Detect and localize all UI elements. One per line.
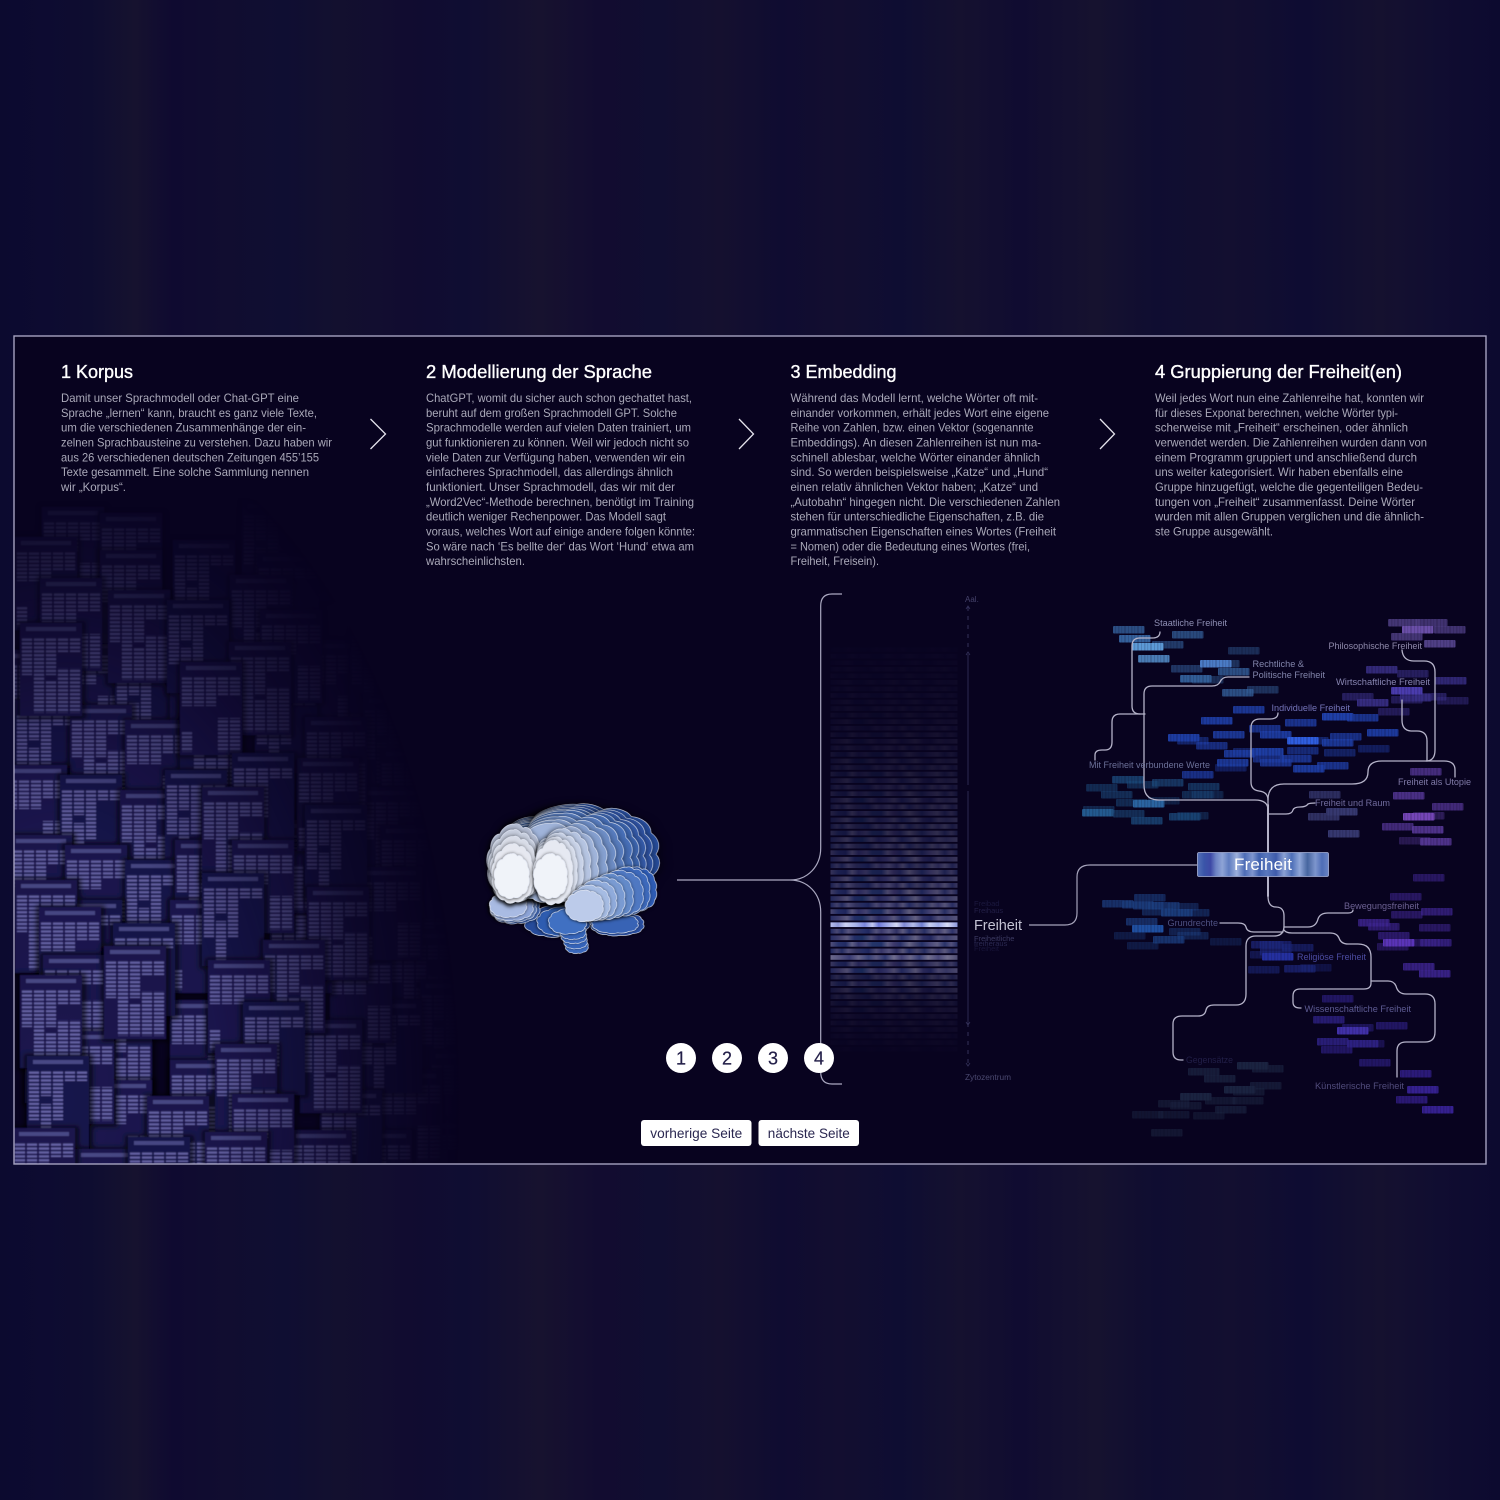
cluster bars: Religiöse Freiheit <box>1248 941 1332 974</box>
text block 4: Gruppe hinzugefügt, welche die gegenteiligen Bedeu- <box>1155 480 1423 494</box>
word list around Freiheit: Freiheitliche <box>974 934 1014 943</box>
button: nächste Seite: nächste Seite <box>768 1125 850 1141</box>
cluster bars: Freiheit als Utopie <box>1382 768 1464 846</box>
arrow 2 <box>739 419 754 449</box>
central Freiheit box <box>1198 852 1328 876</box>
button: nächste Seite <box>758 1120 859 1146</box>
brace connecting brain to embedding chart <box>677 594 842 1084</box>
text block 3: grammatischen Eigenschaften eines Wortes (Freiheit <box>790 524 1057 538</box>
text block 1: aus 26 verschiedenen deutschen Zeitungen 455’155 <box>61 450 319 464</box>
text block 4: ste Gruppe ausgewählt. <box>1155 524 1273 538</box>
cluster bars: Wissenschaftliche Freiheit <box>1313 995 1408 1066</box>
panel border <box>14 336 1486 1164</box>
section 4: Gruppierung der Freiheit(en) <box>1154 362 1427 538</box>
label: Philosophische Freiheit: Philosophische Freiheit <box>1328 641 1422 652</box>
label: Freiheit als Utopie: Freiheit als Utopie <box>1398 777 1471 788</box>
vocabulary axis from Aal to Zytozentrum <box>965 595 1011 1082</box>
dot 1 <box>666 1043 696 1073</box>
label: Wissenschaftliche Freiheit: Wissenschaftliche Freiheit <box>1304 1004 1411 1015</box>
text block 2: wahrscheinlichsten. <box>425 554 525 568</box>
panel: main frame <box>2 336 1486 1245</box>
word cluster map <box>1029 610 1480 1140</box>
text block 2: einfacheres Sprachmodell, das allerdings ähnlich <box>426 465 673 479</box>
text block 1: zelnen Sprachbausteine zu verstehen. Dazu haben wir <box>61 436 332 450</box>
arrow 3 <box>1100 419 1114 449</box>
illustration: pile of text documents (corpus) <box>14 510 425 1164</box>
text block 1: Sprache „lernen“ kann, braucht es ganz viele Texte, <box>61 406 317 420</box>
stripe texture on bars <box>1080 610 1480 1140</box>
text block 3 <box>790 391 1060 568</box>
dot 2 <box>712 1043 742 1073</box>
text block 3: stehen für unterschiedliche Eigenschaften, z.B. die <box>790 510 1044 524</box>
text block 2: beruht auf dem großen Sprachmodell GPT. Solche <box>426 406 677 420</box>
button: vorherige Seite: vorherige Seite <box>650 1125 743 1141</box>
text block 2: funktioniert. Unser Sprachmodell, das wir mit der <box>426 480 675 494</box>
heading 1: 1 Korpus <box>61 362 133 382</box>
text block 2: voraus, welches Wort auf einige andere folgen könnte: <box>426 524 695 538</box>
heading 2: 2 Modellierung der Sprache <box>426 362 652 382</box>
text block 4: Weil jedes Wort nun eine Zahlenreihe hat, konnten wir <box>1155 391 1424 405</box>
dot 4: 4 <box>814 1048 824 1068</box>
cluster bars: Individuelle Freiheit <box>1168 706 1398 778</box>
text block 4: wurden mit allen Gruppen verglichen und die ähnlich- <box>1154 510 1424 524</box>
axis label: Zytozentrum: Zytozentrum <box>965 1072 1011 1082</box>
page navigation dots <box>666 1043 834 1073</box>
text block 4: scherweise mit „Freiheit“ erscheinen, oder ähnlich <box>1155 421 1408 435</box>
section 3: Embedding <box>790 362 1060 568</box>
cluster bars: Freiheit und Raum <box>1308 791 1360 838</box>
text block 4: uns weiter kategorisiert. Wir haben ebenfalls eine <box>1155 465 1403 479</box>
cluster bars: Bewegungsfreiheit <box>1358 874 1452 978</box>
central Freiheit box: Freiheit <box>1234 855 1292 874</box>
word list around Freiheit: Freibad <box>974 899 999 908</box>
cluster bars: Gegensätze <box>1132 1062 1284 1136</box>
heatmap: embedding vectors of words <box>830 647 958 1052</box>
text block 3: sind. So werden beispielsweise „Katze“ und „Hund“ <box>790 465 1048 479</box>
word list around Freiheit <box>974 899 1022 953</box>
text block 3: Reihe von Zahlen, bzw. einen Vektor (sogenannte <box>790 421 1034 435</box>
label: Individuelle Freiheit: Individuelle Freiheit <box>1272 703 1350 714</box>
label: Bewegungsfreiheit: Bewegungsfreiheit <box>1344 901 1419 912</box>
button: vorherige Seite <box>641 1120 752 1146</box>
axis label: Aal: Aal. <box>965 595 979 604</box>
text block 2: viele Daten zur Verfügung haben, verwenden wir ein <box>426 450 685 464</box>
cluster bars: Philosophische Freiheit <box>1388 619 1466 648</box>
text block 2: So wäre nach ‘Es bellte der‘ das Wort ‘Hund‘ etwa am <box>426 539 694 553</box>
dot 3: 3 <box>768 1048 778 1068</box>
label: Religiöse Freiheit: Religiöse Freiheit <box>1297 952 1366 963</box>
label: Grundrechte: Grundrechte <box>1168 918 1218 929</box>
label: Künstlerische Freiheit: Künstlerische Freiheit <box>1315 1081 1404 1092</box>
cluster bars: Künstlerische Freiheit <box>1396 1070 1454 1114</box>
text block 2: ChatGPT, womit du sicher auch schon gechattet hast, <box>426 391 692 405</box>
text block 2: gut funktionieren zu können. Weil wir jedoch nicht so <box>426 436 689 450</box>
text block 2 <box>425 391 695 568</box>
label: Freiheit und Raum: Freiheit und Raum <box>1315 798 1390 809</box>
word list around Freiheit: freiheraus <box>974 939 1008 948</box>
text block 3: „Autobahn“ hingegen nicht. Die verschiedenen Zahlen <box>790 495 1060 509</box>
heading 4: 4 Gruppierung der Freiheit(en) <box>1155 362 1402 382</box>
text block 1: Texte gesammelt. Eine solche Sammlung nennen <box>61 465 309 479</box>
text block 4: tungen von „Freiheit“ zusammenfasst. Deine Wörter <box>1155 495 1415 509</box>
arrow 1 <box>370 419 386 449</box>
heading 3: 3 Embedding <box>790 362 896 382</box>
label: Mit Freiheit verbundene Werte: Mit Freiheit verbundene Werte <box>1089 760 1210 771</box>
text block 2: „Word2Vec“-Methode berechnen, benötigt im Training <box>426 495 694 509</box>
text block 3: = Nomen) oder die Bedeutung eines Wortes (frei, <box>790 539 1030 553</box>
dot 4 <box>804 1043 834 1073</box>
text block 4: einem Programm gruppiert und anschließend durch <box>1155 450 1417 464</box>
text block 3: einander vorkommen, erhält jedes Wort eine eigene <box>790 406 1049 420</box>
tree connector lines <box>1095 632 1455 1077</box>
label: Staatliche Freiheit: Staatliche Freiheit <box>1154 618 1227 629</box>
dot 2: 2 <box>722 1048 732 1068</box>
text block 2: deutlich weniger Rechenpower. Das Modell sagt <box>426 510 667 524</box>
text block 4 <box>1154 391 1427 538</box>
text block 1: wir „Korpus“. <box>60 480 126 494</box>
text block 4: verwendet werden. Die Zahlenreihen wurden dann von <box>1155 436 1427 450</box>
text block 3: schinell ablesbar, welche Wörter einander ähnlich <box>790 450 1040 464</box>
label: Wirtschaftliche Freiheit: Wirtschaftliche Freiheit <box>1336 677 1430 688</box>
word: Freiheit: Freiheit <box>974 918 1022 934</box>
text block 1 <box>60 391 332 494</box>
cluster bars: Wirtschaftliche Freiheit <box>1342 666 1468 716</box>
label: Rechtliche & Politische Freiheit <box>1252 659 1325 681</box>
cluster bars: Mit Freiheit verbundene Werte <box>1082 776 1224 824</box>
text block 3: Freiheit, Freisein). <box>790 554 879 568</box>
text block 2: Sprachmodelle werden auf vielen Daten trainiert, um <box>426 421 691 435</box>
label: Rechtliche & Politische Freiheit: Politische Freiheit <box>1252 670 1325 681</box>
section 2: Modellierung der Sprache <box>425 362 695 568</box>
text block 1: um die verschiedenen Zusammenhänge der ein- <box>61 421 306 435</box>
word list around Freiheit: Freiheit <box>974 944 1000 953</box>
text block 1: Damit unser Sprachmodell oder Chat-GPT eine <box>61 391 299 405</box>
icon: layered blue brain <box>487 804 660 954</box>
cluster labels <box>1089 618 1471 1092</box>
text block 3: einen relativ ähnlichen Vektor haben; „Katze“ und <box>790 480 1038 494</box>
word list around Freiheit: Freihaus <box>974 906 1003 915</box>
connector from Freiheit word to Freiheit box <box>1029 865 1197 925</box>
cluster bars: Grundrechte <box>1102 894 1242 950</box>
text block 3: Embeddings). An diesen Zahlenreihen ist nun ma- <box>790 436 1041 450</box>
label: Rechtliche & Politische Freiheit: Rechtliche & <box>1252 659 1305 670</box>
section 1: Korpus <box>60 362 332 494</box>
text block 4: für dieses Exponat berechnen, welche Wörter typi- <box>1155 406 1398 420</box>
dot 1: 1 <box>676 1048 686 1068</box>
infographic canvas <box>13 335 1487 1165</box>
dot 3 <box>758 1043 788 1073</box>
text block 3: Während das Modell lernt, welche Wörter oft mit- <box>790 391 1038 405</box>
cluster bars: Staatliche und rechtliche Freiheit <box>1113 626 1278 696</box>
label: Gegensätze: Gegensätze <box>1186 1055 1233 1066</box>
